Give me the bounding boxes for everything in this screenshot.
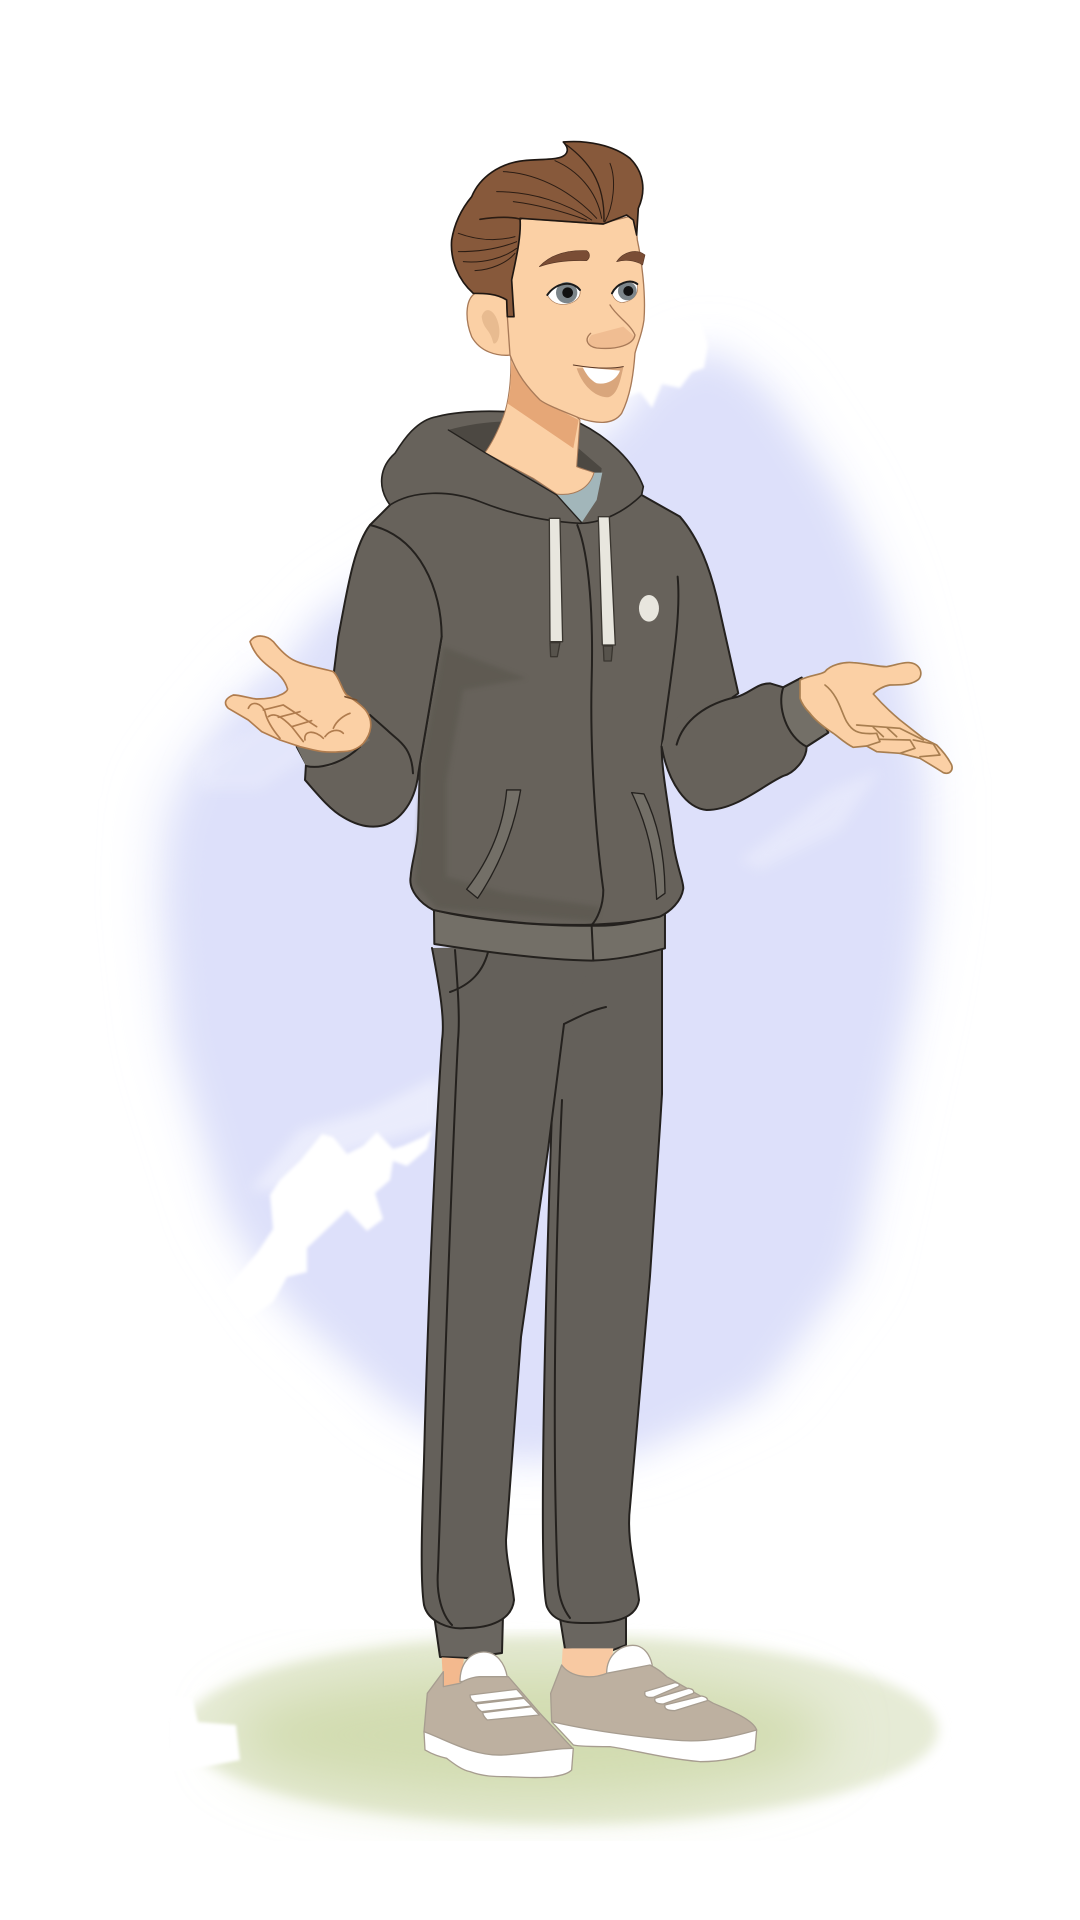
white brush splash xyxy=(225,1130,432,1320)
left cuff xyxy=(297,713,370,767)
face xyxy=(507,215,644,422)
right shoe xyxy=(551,1645,757,1762)
right pocket xyxy=(632,793,665,899)
shoes xyxy=(424,1645,757,1778)
neck xyxy=(485,355,594,494)
head xyxy=(451,142,645,422)
left sleeve xyxy=(297,525,442,827)
left shoe xyxy=(424,1652,573,1778)
neck, shirt and hood xyxy=(382,355,643,523)
right trouser cuff xyxy=(559,1610,626,1652)
right trouser leg xyxy=(500,945,662,1623)
trousers xyxy=(422,945,662,1658)
hoodie xyxy=(297,480,828,961)
hood xyxy=(382,411,643,523)
mouth xyxy=(577,367,623,397)
left trouser leg xyxy=(422,945,600,1628)
white notch at left of ground xyxy=(170,1695,240,1772)
right sleeve seam on torso xyxy=(662,577,678,747)
nose xyxy=(589,327,635,349)
left trouser cuff xyxy=(434,1615,503,1658)
right sleeve xyxy=(662,678,828,810)
ground: green grass patch xyxy=(170,1636,938,1824)
badge xyxy=(639,595,659,622)
jagged top edge near the face xyxy=(615,320,708,408)
eyebrows xyxy=(539,251,589,267)
drawstrings xyxy=(549,517,615,661)
hood inner xyxy=(448,422,505,453)
zipper xyxy=(577,525,603,925)
t-shirt xyxy=(557,473,602,523)
neck shadow xyxy=(507,360,579,448)
hair xyxy=(451,142,643,317)
left pocket xyxy=(467,790,521,898)
torso xyxy=(370,480,738,925)
faded wash upper left xyxy=(215,610,290,690)
right hand xyxy=(800,662,952,773)
eyes xyxy=(547,284,580,304)
background: lavender watercolor blob xyxy=(160,320,925,1455)
body shading xyxy=(415,647,600,922)
right cuff xyxy=(781,678,828,747)
faded wash above the splash xyxy=(250,1075,440,1190)
hem band xyxy=(434,910,665,961)
ear xyxy=(467,290,517,355)
left hand xyxy=(226,636,371,752)
